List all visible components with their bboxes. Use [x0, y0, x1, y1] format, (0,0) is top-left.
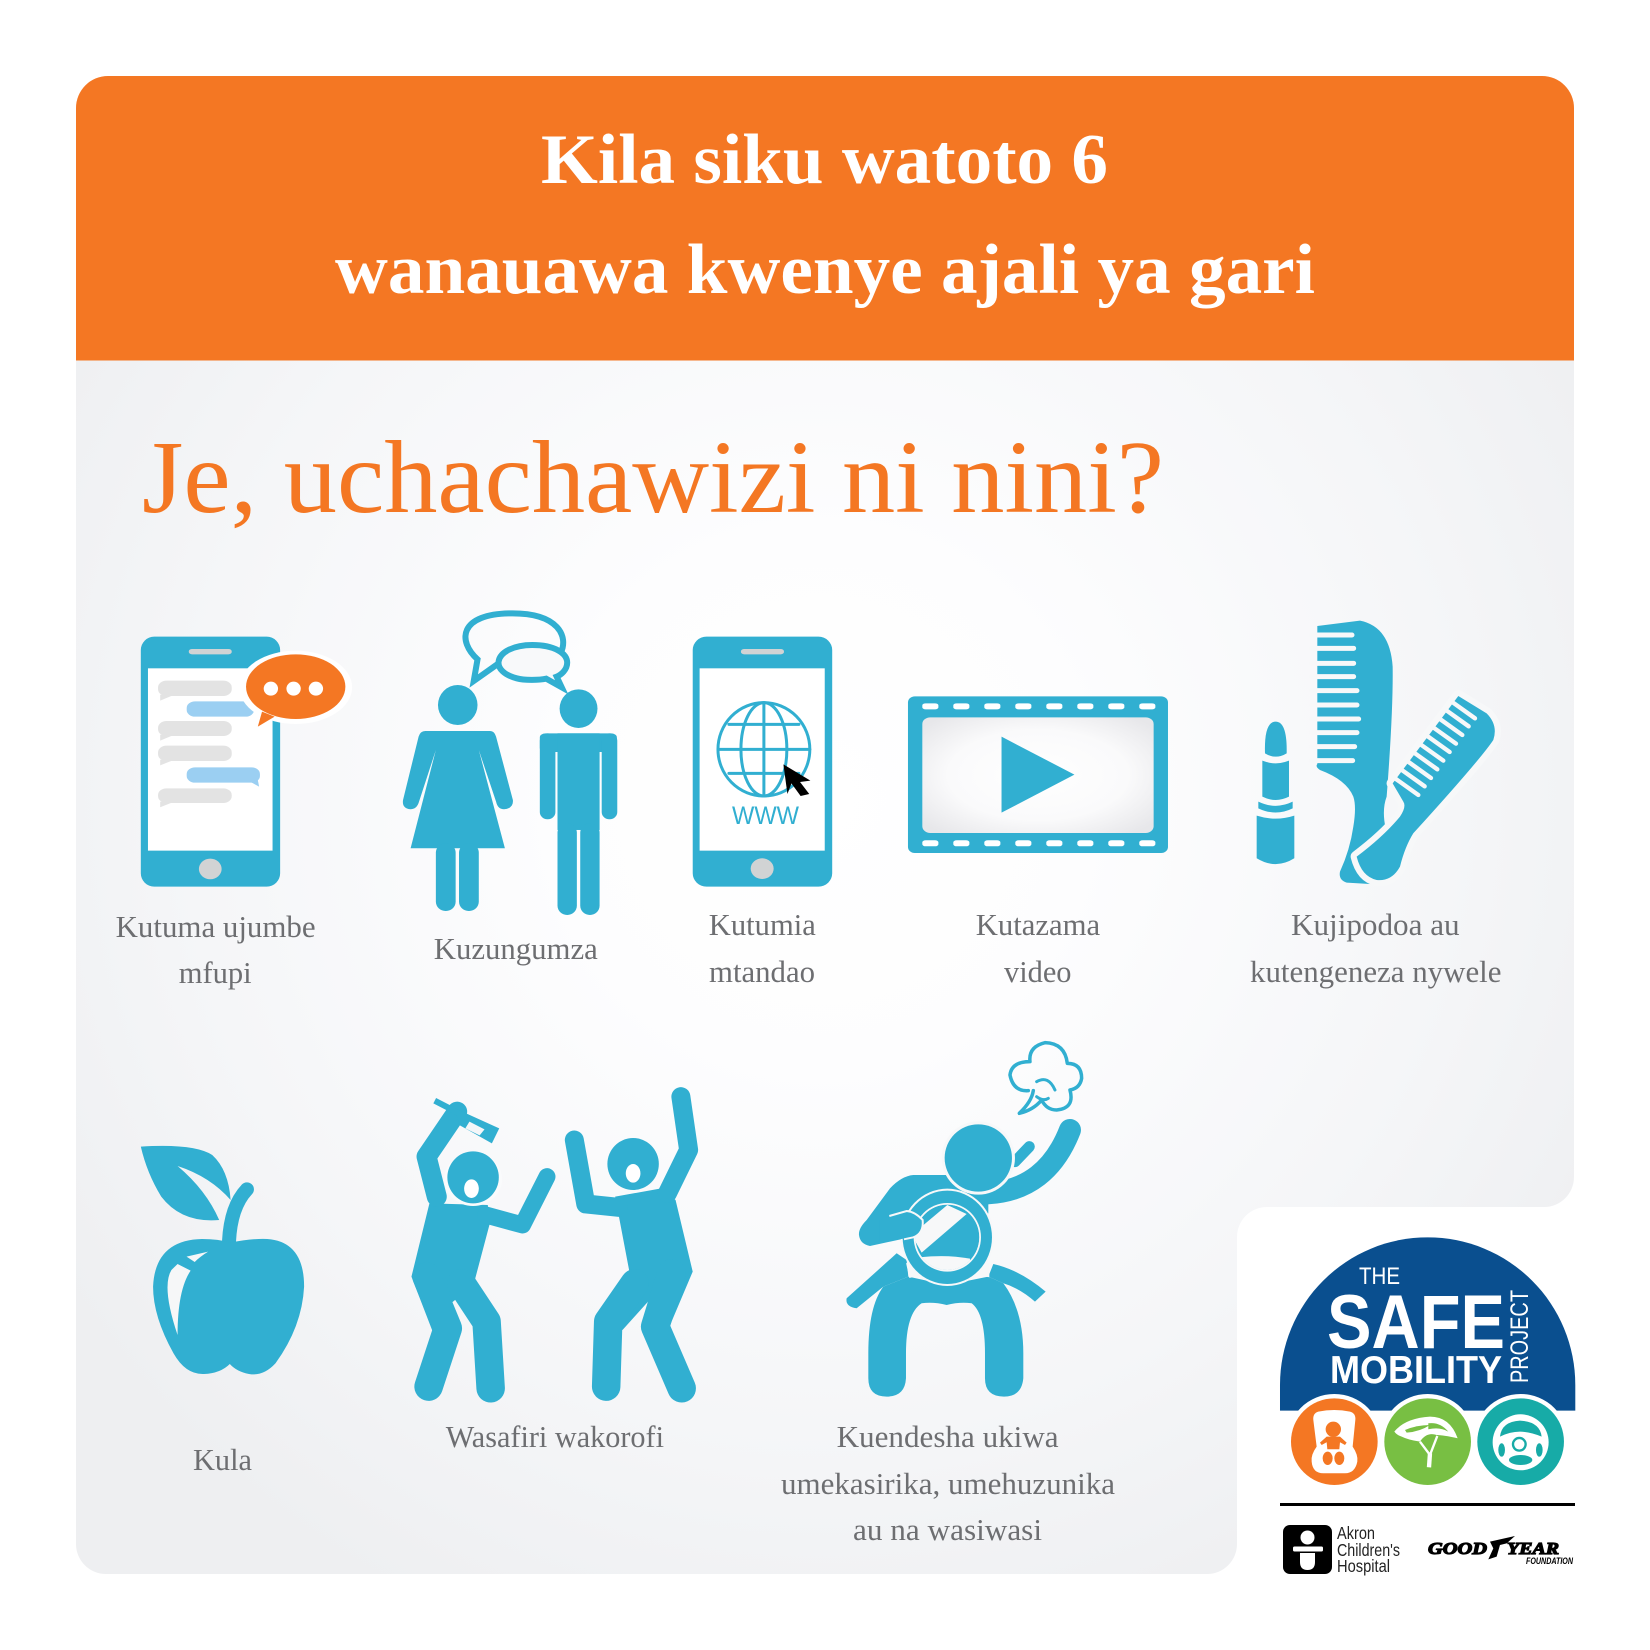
- logo text: SAFE: [1327, 1280, 1505, 1365]
- logo: Goodyear Foundation: [1428, 1536, 1574, 1567]
- header banner: [76, 76, 1574, 360]
- label: Kuzungumza: Kuzungumza: [434, 931, 598, 966]
- icon: unruly passengers: [411, 1097, 693, 1388]
- label: Kutumia mtandao: [709, 907, 816, 989]
- label: Kutazama video: video: [1004, 954, 1072, 989]
- logo text: [1327, 1263, 1534, 1392]
- label: Wasafiri wakorofi: Wasafiri wakorofi: [446, 1419, 664, 1454]
- logo: Akron Children's Hospital: Akron: [1337, 1523, 1375, 1543]
- logo: Goodyear Foundation: FOUNDATION: [1526, 1556, 1574, 1567]
- icon: video film strip with play button: [908, 696, 1168, 853]
- label: Kuendesha ukiwa umekasirika: au na wasiwasi: [853, 1512, 1042, 1547]
- icon: phone with text messages: [141, 637, 352, 887]
- icon: child seat: [1291, 1398, 1378, 1485]
- label: Kujipodoa au kutengeneza nywele: Kujipodoa au: [1291, 907, 1460, 942]
- icon: man and woman talking: [403, 613, 617, 915]
- icon: steering wheel: [1477, 1398, 1564, 1485]
- logo: The Safe Mobility Project: [1280, 1237, 1575, 1489]
- label: Kutazama video: Kutazama: [976, 907, 1100, 942]
- logo: Goodyear Foundation: GOOD: [1428, 1539, 1487, 1558]
- logo: Akron Children's Hospital: Children's: [1337, 1540, 1400, 1560]
- panel: main grey background: [76, 355, 1574, 1574]
- label: Kuendesha ukiwa umekasirika: umekasirika, umehuzunika: [781, 1466, 1115, 1501]
- icon: angry unbelted driver: [846, 1043, 1082, 1397]
- icon: lipstick and combs: [1257, 621, 1495, 884]
- logo: Akron Children's Hospital: Hospital: [1337, 1556, 1390, 1576]
- logo text: THE: [1359, 1263, 1400, 1290]
- label: Kutazama video: [976, 907, 1100, 989]
- label: Kutuma ujumbe mfupi: [116, 909, 316, 990]
- label: Kujipodoa au kutengeneza nywele: kutengeneza nywele: [1250, 954, 1502, 989]
- label: Kutumia mtandao: mtandao: [709, 954, 815, 989]
- logo: Akron Children's Hospital: [1283, 1523, 1400, 1576]
- icon: bicycle helmet: [1384, 1398, 1471, 1485]
- logo text: PROJECT: [1506, 1290, 1534, 1383]
- label: Kutumia mtandao: Kutumia: [709, 907, 816, 942]
- label: Kutuma ujumbe mfupi: Kutuma ujumbe: [116, 909, 316, 944]
- header line 1: Kila siku watoto 6: [541, 121, 1108, 199]
- icon: phone browsing internet: [693, 637, 832, 887]
- logo: Goodyear Foundation: YEAR: [1507, 1539, 1559, 1558]
- label: Kujipodoa au kutengeneza nywele: [1250, 907, 1502, 989]
- header line 2: wanauawa kwenye ajali ya gari: [335, 231, 1315, 309]
- title question: Je, uchachawizi ni nini?: [142, 420, 1164, 535]
- label: Kutuma ujumbe mfupi: mfupi: [179, 955, 252, 990]
- logo text: MOBILITY: [1330, 1349, 1502, 1392]
- label: Kuendesha ukiwa umekasirika: Kuendesha ukiwa: [837, 1419, 1059, 1454]
- icon: apple: [141, 1146, 304, 1374]
- icon: phone browsing internet: WWW: [732, 802, 799, 830]
- label: Kula: Kula: [193, 1442, 252, 1477]
- label: Kuendesha ukiwa umekasirika: [781, 1419, 1115, 1547]
